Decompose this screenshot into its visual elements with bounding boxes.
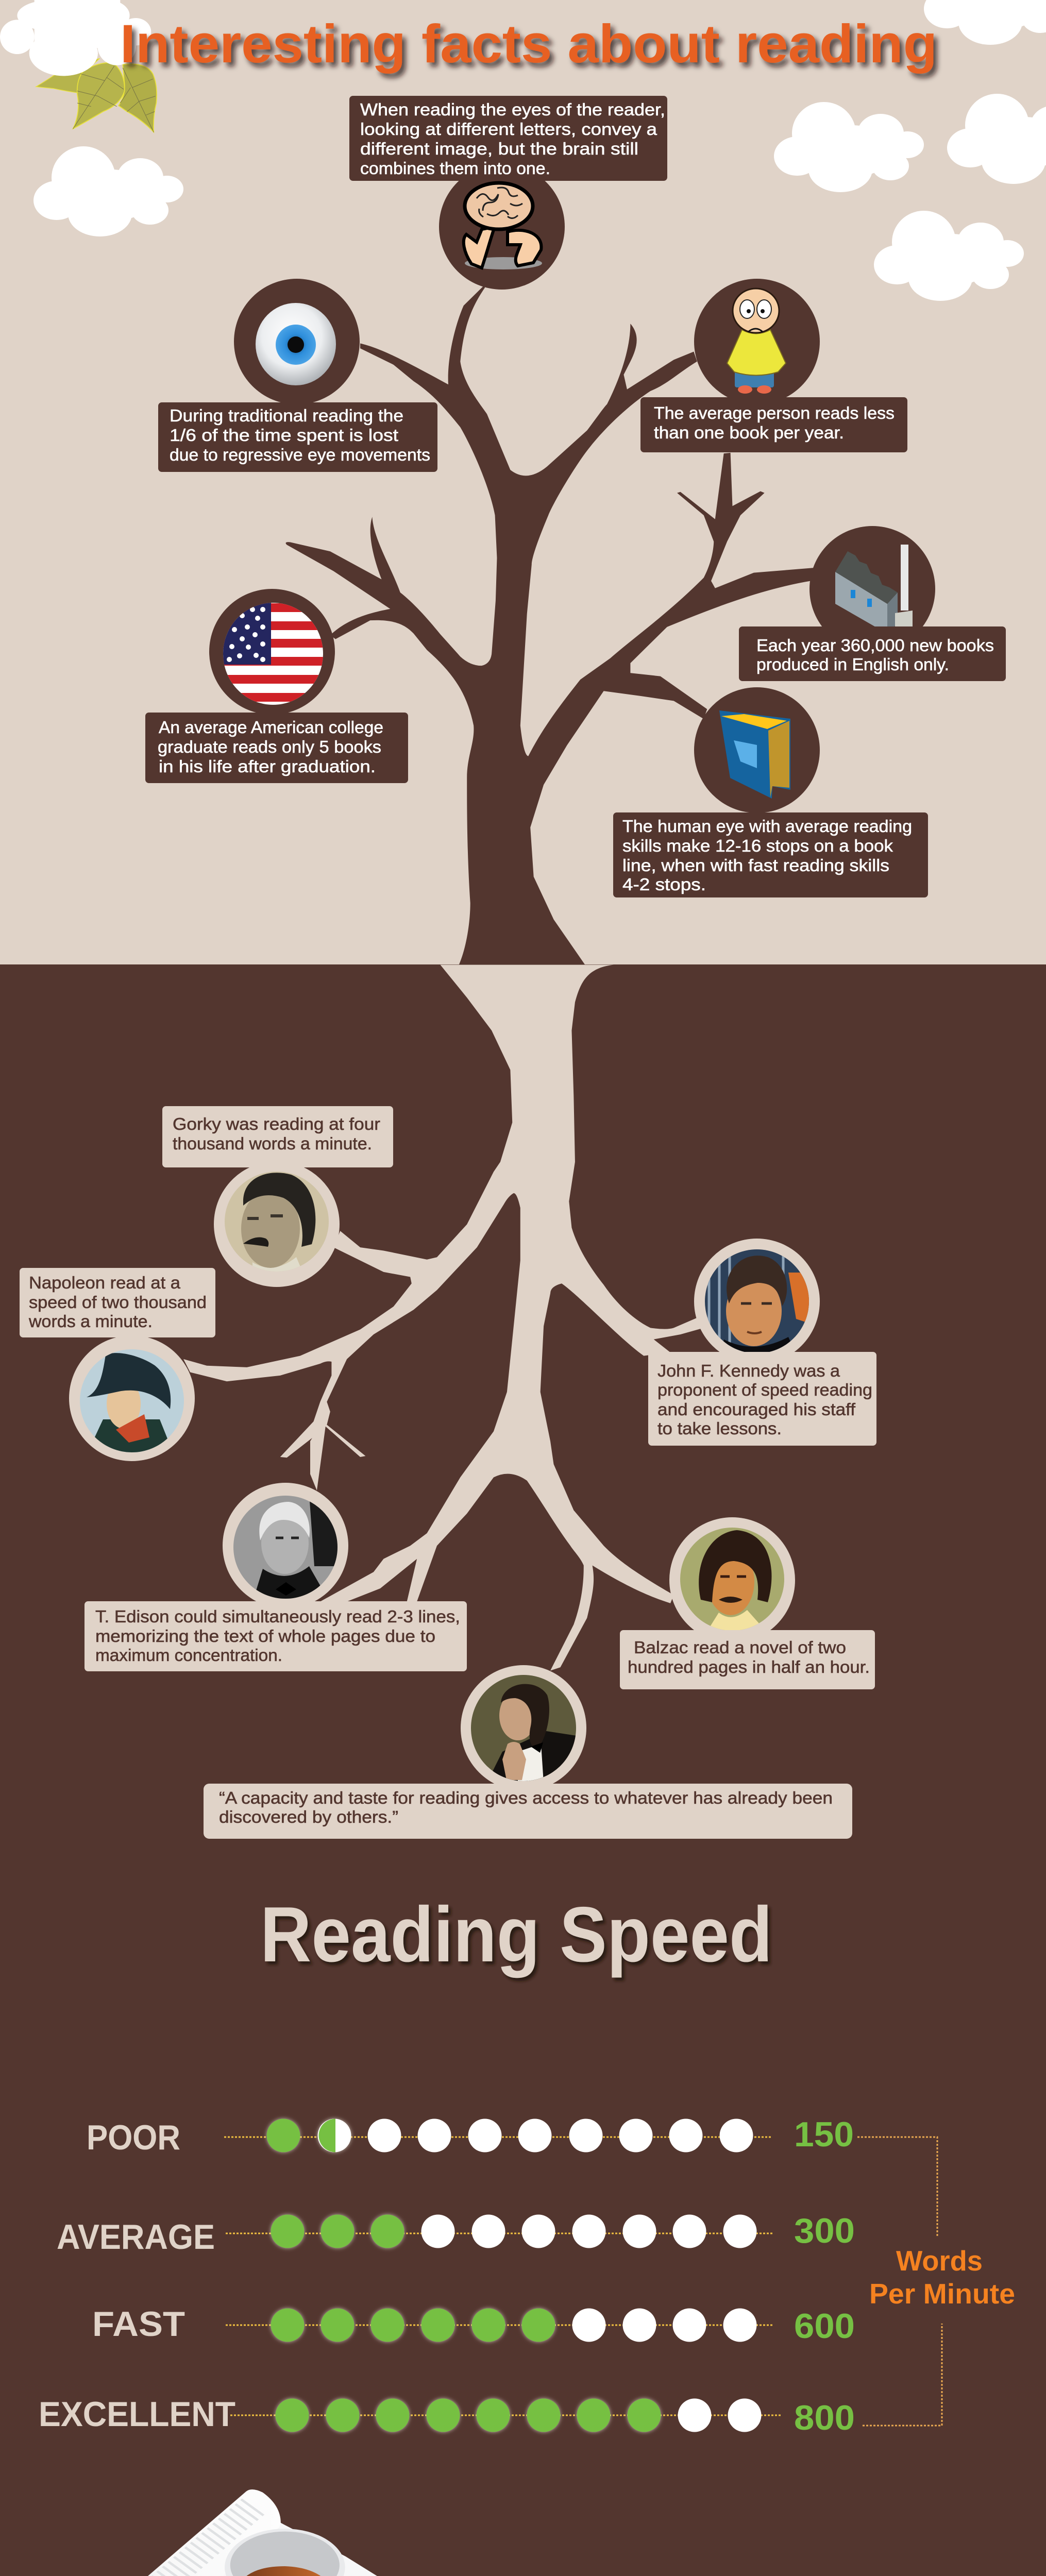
row: poor: POOR	[87, 2118, 180, 2157]
callout: brain fact: combines them into one.	[360, 159, 550, 178]
callout: eye fact	[158, 402, 437, 472]
callout: graduate fact: graduate reads only 5 books	[158, 737, 381, 756]
icon: american flag	[222, 603, 325, 706]
callout: person fact: than one book per year.	[654, 423, 844, 442]
callout: stops fact: line, when with fast reading skills	[622, 856, 889, 875]
row: poor	[87, 2115, 854, 2157]
panel: average person fact	[640, 279, 907, 452]
row: excellent: EXCELLENT	[39, 2395, 235, 2434]
panel: new books fact	[739, 526, 1006, 681]
callout: Gorky: Gorky was reading at four	[173, 1114, 380, 1133]
tree crown	[286, 286, 814, 965]
medallion: person	[694, 279, 820, 404]
callout: graduate fact	[145, 713, 408, 783]
chart: reading speed	[39, 2115, 1015, 2437]
heading: Reading Speed: Reading Speed	[260, 1891, 772, 1978]
callout: eye fact: 1/6 of the time spent is lost	[170, 426, 398, 445]
portrait: Kennedy	[705, 1249, 809, 1352]
callout: Edison	[85, 1601, 467, 1671]
portrait: Balzac	[680, 1528, 784, 1630]
callout: Balzac	[620, 1630, 875, 1689]
medallion: Gorky frame	[214, 1161, 340, 1287]
callout: new books fact: Each year 360,000 new books	[756, 636, 994, 655]
cloud: top left	[0, 0, 151, 76]
cloud: right middle	[774, 102, 924, 192]
row: average	[57, 2211, 855, 2257]
medallion: book	[694, 687, 820, 813]
icon: brain with legs	[464, 183, 542, 269]
callout: Balzac: Balzac read a novel of two	[634, 1638, 846, 1657]
callout: stops fact: The human eye with average reading	[622, 817, 912, 836]
callout: stops fact: skills make 12-16 stops on a book	[622, 836, 893, 855]
panel: Kennedy	[648, 1239, 876, 1446]
medallion: factory	[809, 526, 935, 652]
callout: Lincoln quote: “A capacity and taste for reading gives access to whatever has already been	[219, 1788, 833, 1807]
icon: book and coffee cup	[49, 2489, 450, 2576]
icon: leaves	[36, 58, 157, 132]
row: average: AVERAGE	[57, 2217, 215, 2257]
medallion: flag	[209, 589, 335, 715]
callout: eye fact: due to regressive eye movements	[170, 445, 430, 464]
portrait: Lincoln	[469, 1673, 580, 1783]
row: fast: 600	[794, 2307, 855, 2346]
callout: brain fact: different image, but the brain still	[360, 139, 638, 158]
callout: eye fact: During traditional reading the	[170, 406, 403, 425]
callout: graduate fact: An average American college	[159, 718, 383, 737]
callout: graduate fact: in his life after graduation.	[159, 757, 376, 776]
callout: stops fact: 4-2 stops.	[622, 875, 706, 894]
callout: brain fact: When reading the eyes of the reader,	[360, 100, 665, 119]
callout: Edison: T. Edison could simultaneously read 2-3 lines,	[95, 1607, 460, 1626]
callout: Gorky: thousand words a minute.	[173, 1134, 372, 1153]
cloud: lower right	[874, 211, 1024, 301]
icon: blue book	[719, 710, 790, 799]
callout: brain fact: looking at different letters, convey a	[360, 120, 657, 139]
icon: factory	[835, 545, 913, 635]
callout: new books fact: produced in English only.	[756, 655, 949, 674]
icon: sad person	[727, 289, 786, 394]
background: soil	[0, 964, 1046, 2576]
callout: Kennedy: John F. Kennedy was a	[657, 1361, 840, 1380]
medallion: Kennedy frame	[694, 1239, 820, 1364]
panel: Edison	[85, 1483, 467, 1671]
cloud: left	[33, 146, 183, 236]
row: average: 300	[794, 2211, 855, 2250]
callout: Napoleon: speed of two thousand	[29, 1293, 207, 1312]
panel: Lincoln quote	[204, 1665, 852, 1839]
row: excellent	[39, 2395, 855, 2437]
cloud: top right	[924, 0, 1046, 45]
label: words per minute: Per Minute	[869, 2278, 1015, 2310]
callout: Edison: memorizing the text of whole pages due to	[95, 1626, 435, 1646]
medallion: brain	[439, 164, 565, 290]
panel: stops fact	[613, 687, 928, 897]
callout: brain fact	[349, 96, 667, 181]
medallion: Napoleon frame	[69, 1335, 195, 1461]
callout: Balzac: hundred pages in half an hour.	[628, 1657, 870, 1676]
panel: american graduate fact	[145, 589, 408, 783]
panel: eye fact	[158, 279, 437, 472]
panel: brain fact	[349, 96, 667, 290]
portrait: Napoleon	[80, 1349, 184, 1452]
callout: Napoleon	[20, 1268, 215, 1337]
row: fast: FAST	[92, 2304, 185, 2344]
callout: Lincoln quote: discovered by others.”	[219, 1807, 398, 1826]
callout: Napoleon: Napoleon read at a	[29, 1273, 181, 1292]
panel: Napoleon	[20, 1268, 215, 1461]
callout: Napoleon: words a minute.	[28, 1312, 153, 1331]
title: Interesting facts about reading	[120, 14, 937, 74]
row: fast	[92, 2304, 855, 2346]
tree roots	[183, 965, 704, 1671]
medallion: eye	[234, 279, 360, 404]
callout: Kennedy: proponent of speed reading	[657, 1380, 872, 1399]
panel: Balzac	[620, 1517, 875, 1689]
callout: new books fact	[739, 626, 1006, 681]
medallion: Lincoln frame	[461, 1665, 586, 1791]
panel: facts card	[49, 2489, 931, 2576]
callout: Lincoln quote	[204, 1784, 852, 1839]
callout: Kennedy: and encouraged his staff	[657, 1400, 856, 1419]
portrait: Edison	[232, 1494, 340, 1602]
callout: Gorky	[162, 1106, 393, 1167]
label: words per minute: Words	[896, 2245, 983, 2277]
callout: Edison: maximum concentration.	[95, 1646, 282, 1665]
portrait: Gorky	[225, 1172, 329, 1272]
label: words per minute	[869, 2245, 1015, 2310]
icon: eyeball	[256, 303, 336, 385]
row: excellent: 800	[794, 2398, 855, 2437]
row: poor: 150	[794, 2115, 854, 2154]
panel: Gorky	[162, 1106, 393, 1287]
cloud: far right	[947, 94, 1046, 184]
callout: person fact: The average person reads less	[654, 403, 895, 422]
medallion: Balzac frame	[669, 1517, 795, 1643]
medallion: Edison frame	[223, 1483, 348, 1608]
callout: person fact	[640, 397, 907, 452]
callout: Kennedy: to take lessons.	[657, 1419, 782, 1438]
callout: Kennedy	[648, 1352, 876, 1446]
callout: stops fact	[613, 812, 928, 897]
